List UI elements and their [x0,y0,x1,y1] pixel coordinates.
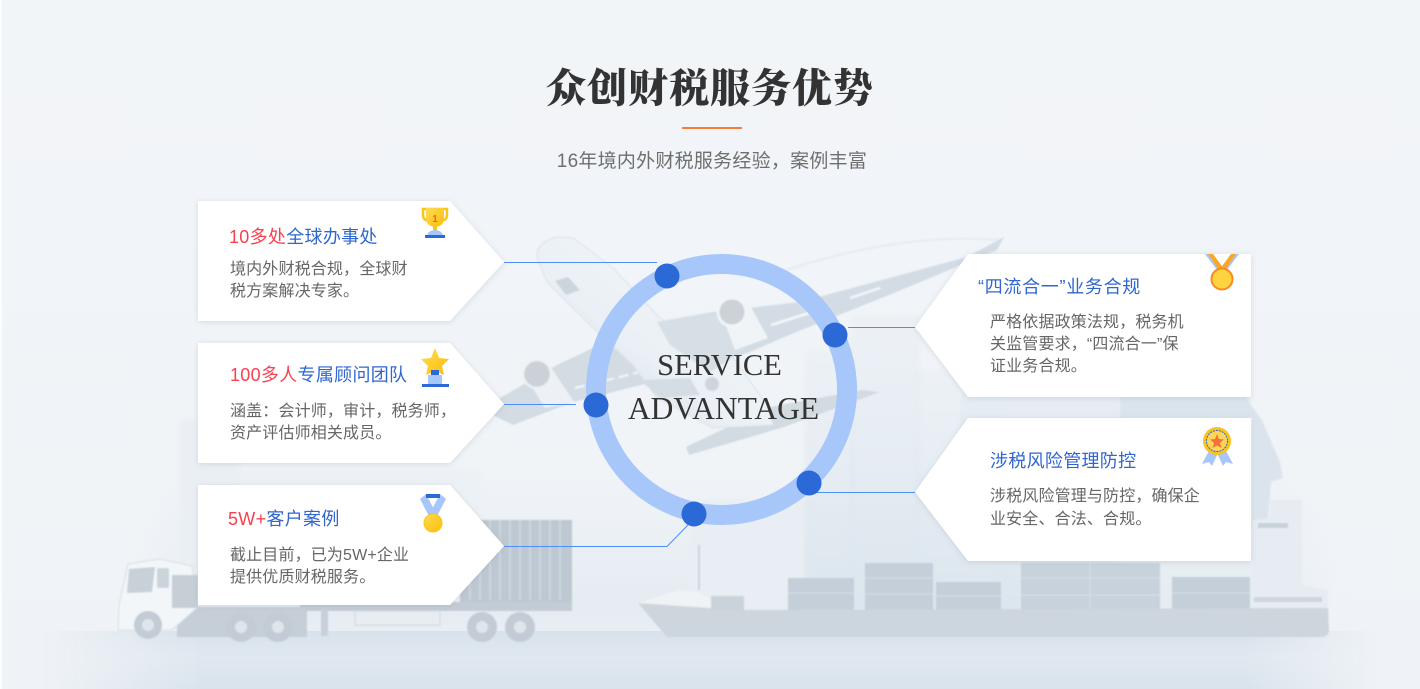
plane right wing [657,237,1004,372]
text block: 截止目前，已为5W+企业 [230,546,409,564]
ring nodes [584,264,848,526]
connector lines [504,262,915,546]
plane fuselage [537,237,773,428]
text block: 涵盖：会计师，审计，税务师， [230,402,456,420]
text block: 证业务合规。 [990,357,1087,375]
truck container [460,520,572,602]
text block: 税方案解决专家。 [230,282,359,300]
ship superstructure [1252,500,1328,610]
panel: dedicated team [198,343,504,463]
heading: 100多人专属顾问团队 [230,365,407,385]
background: globe [960,285,1283,570]
ship hull [638,603,1329,637]
text block: 关监管要求，“四流合一”保 [990,335,1179,353]
text block: 严格依据政策法规，税务机 [990,313,1184,331]
background: airplane [493,237,1004,455]
ring label: ADVANTAGE [628,391,819,426]
truck wheels [134,611,162,639]
icon: star trophy [421,348,449,387]
text block: 业安全、合法、合规。 [990,510,1152,528]
ring label [628,348,819,426]
heading: 5W+客户案例 [228,509,340,529]
title divider [682,127,742,129]
ship containers [788,578,854,610]
text block: 资产评估师相关成员。 [230,424,392,442]
background: container ship [638,500,1329,637]
panel: global offices [198,201,504,321]
floor reflection [40,631,1380,689]
service advantage ring [584,264,848,526]
icon: trophy [423,208,447,238]
ring label: SERVICE [657,348,782,382]
panel: risk control [915,418,1251,561]
heading: “四流合一”业务合规 [978,277,1141,297]
heading: 10多处全球办事处 [229,227,378,247]
text block: 提供优质财税服务。 [230,568,375,586]
background: city buildings [180,315,1120,610]
icon: rosette [1202,427,1233,466]
icon: medal [420,494,446,532]
subtitle: 16年境内外财税服务经验，案例丰富 [557,150,867,172]
truck cab [118,559,198,630]
background: truck [118,520,572,642]
plane tail [686,390,880,455]
icon: trophy: 1 [432,214,438,225]
plane left wing [493,348,653,425]
text block: 境内外财税合规，全球财 [230,259,408,278]
icon: gold medal [1205,254,1239,290]
plane engines [718,302,768,350]
panel: client cases [198,485,504,605]
text block: 涉税风险管理与防控，确保企 [990,487,1200,505]
background: ground haze [170,480,1300,635]
heading: 涉税风险管理防控 [990,451,1136,471]
title: 众创财税服务优势 [546,57,874,114]
panel: compliance [915,254,1251,397]
